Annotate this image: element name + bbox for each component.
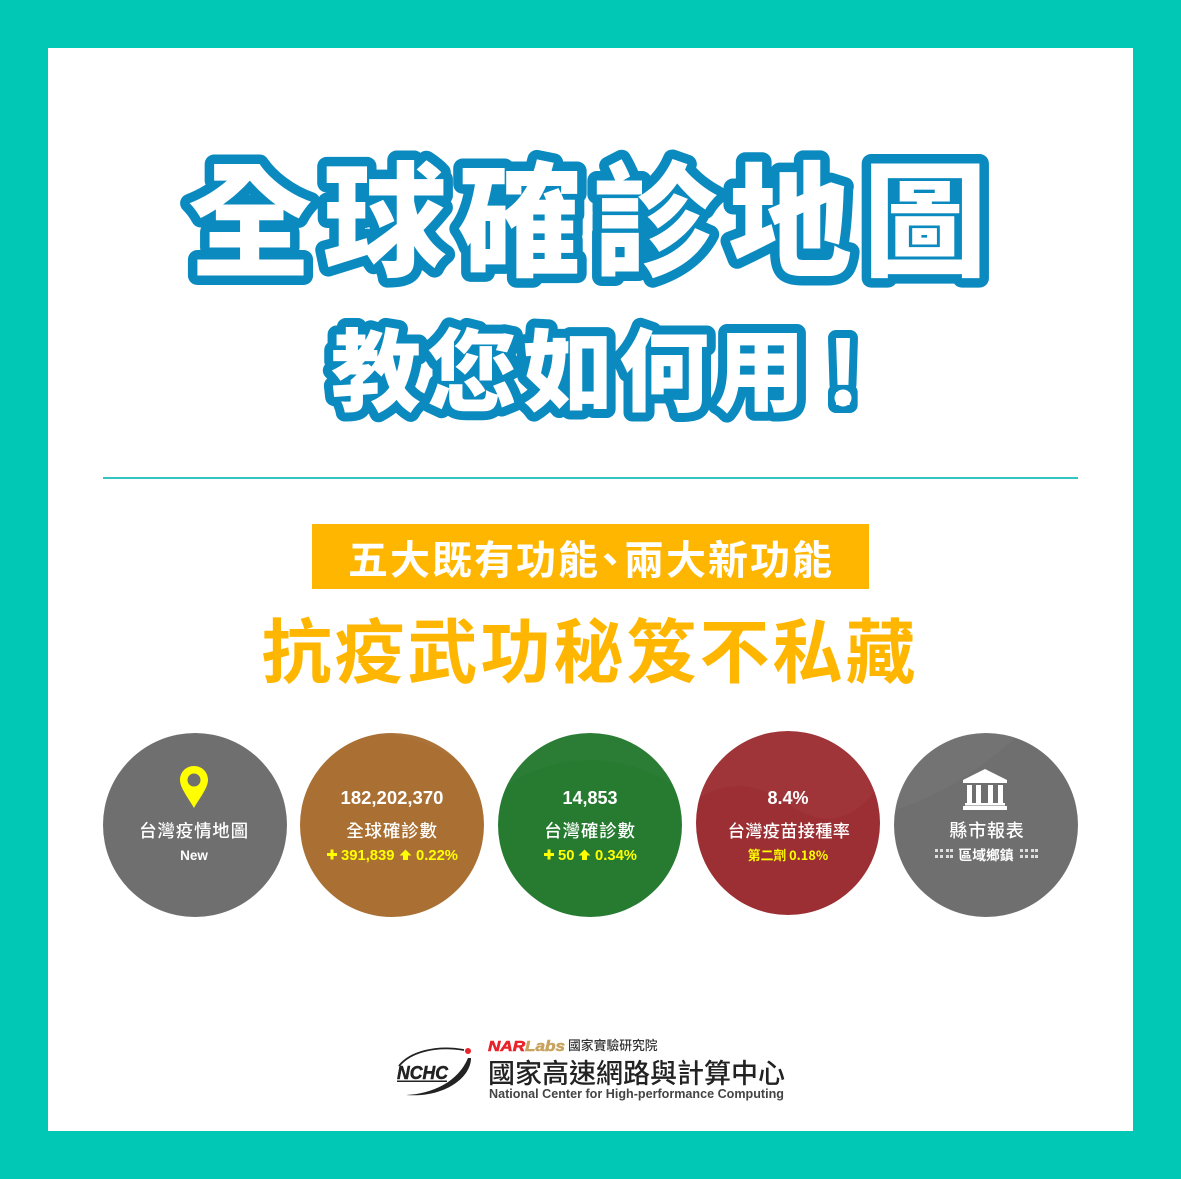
circle: map — [103, 733, 287, 917]
circle: Taiwan cases — [498, 733, 682, 917]
circle: vaccination — [696, 731, 880, 915]
sublabel: New — [180, 848, 208, 863]
change: 第二劑 0.18% — [748, 845, 828, 864]
subtitle banner: 兩大新功能 — [624, 528, 834, 586]
center name: 國家高速網路與計算中心 — [488, 1052, 785, 1091]
logo: NCHC — [397, 1035, 785, 1101]
title: line 2: 教您如何用 — [331, 300, 811, 430]
circle: global cases — [300, 733, 484, 917]
title: line 2: ! — [827, 317, 859, 426]
headline: orange: 抗疫武功秘笈不私藏 — [262, 597, 918, 698]
icon: government building — [963, 769, 1007, 810]
NARLabs line — [488, 1035, 658, 1055]
subtitle banner: 、 — [590, 528, 632, 586]
number: 14,853 — [562, 788, 618, 808]
change — [327, 848, 458, 864]
number: 8.4% — [767, 788, 809, 808]
sublabel: 區域鄉鎮 — [958, 844, 1014, 864]
icon: map pin — [180, 766, 208, 808]
title: line 1: 全球確診地圖 — [188, 122, 998, 302]
NARLabs line: 國家實驗研究院 — [568, 1035, 658, 1054]
label: 縣市報表 — [949, 817, 1025, 843]
label: 台灣確診數 — [544, 818, 636, 843]
change: 0.34% — [595, 848, 637, 864]
circle: county reports — [894, 733, 1078, 917]
dots left — [935, 849, 953, 858]
english name: National Center for High-performance Computing — [489, 1087, 784, 1101]
logo mark — [397, 1048, 471, 1095]
NARLabs line: NAR Labs — [488, 1038, 565, 1055]
change — [544, 848, 637, 864]
number: 182,202,370 — [341, 787, 443, 808]
change: 50 — [558, 848, 574, 864]
logo mark: NCHC — [397, 1062, 449, 1083]
label: 全球確診數 — [346, 818, 438, 843]
change: 0.22% — [416, 848, 458, 864]
label: 台灣疫苗接種率 — [728, 817, 850, 842]
subtitle banner: 五大既有功能 — [348, 528, 600, 586]
dots right — [1020, 849, 1038, 858]
subtitle banner — [312, 524, 869, 589]
change: 391,839 — [341, 848, 394, 864]
label: 台灣疫情地圖 — [139, 818, 249, 843]
